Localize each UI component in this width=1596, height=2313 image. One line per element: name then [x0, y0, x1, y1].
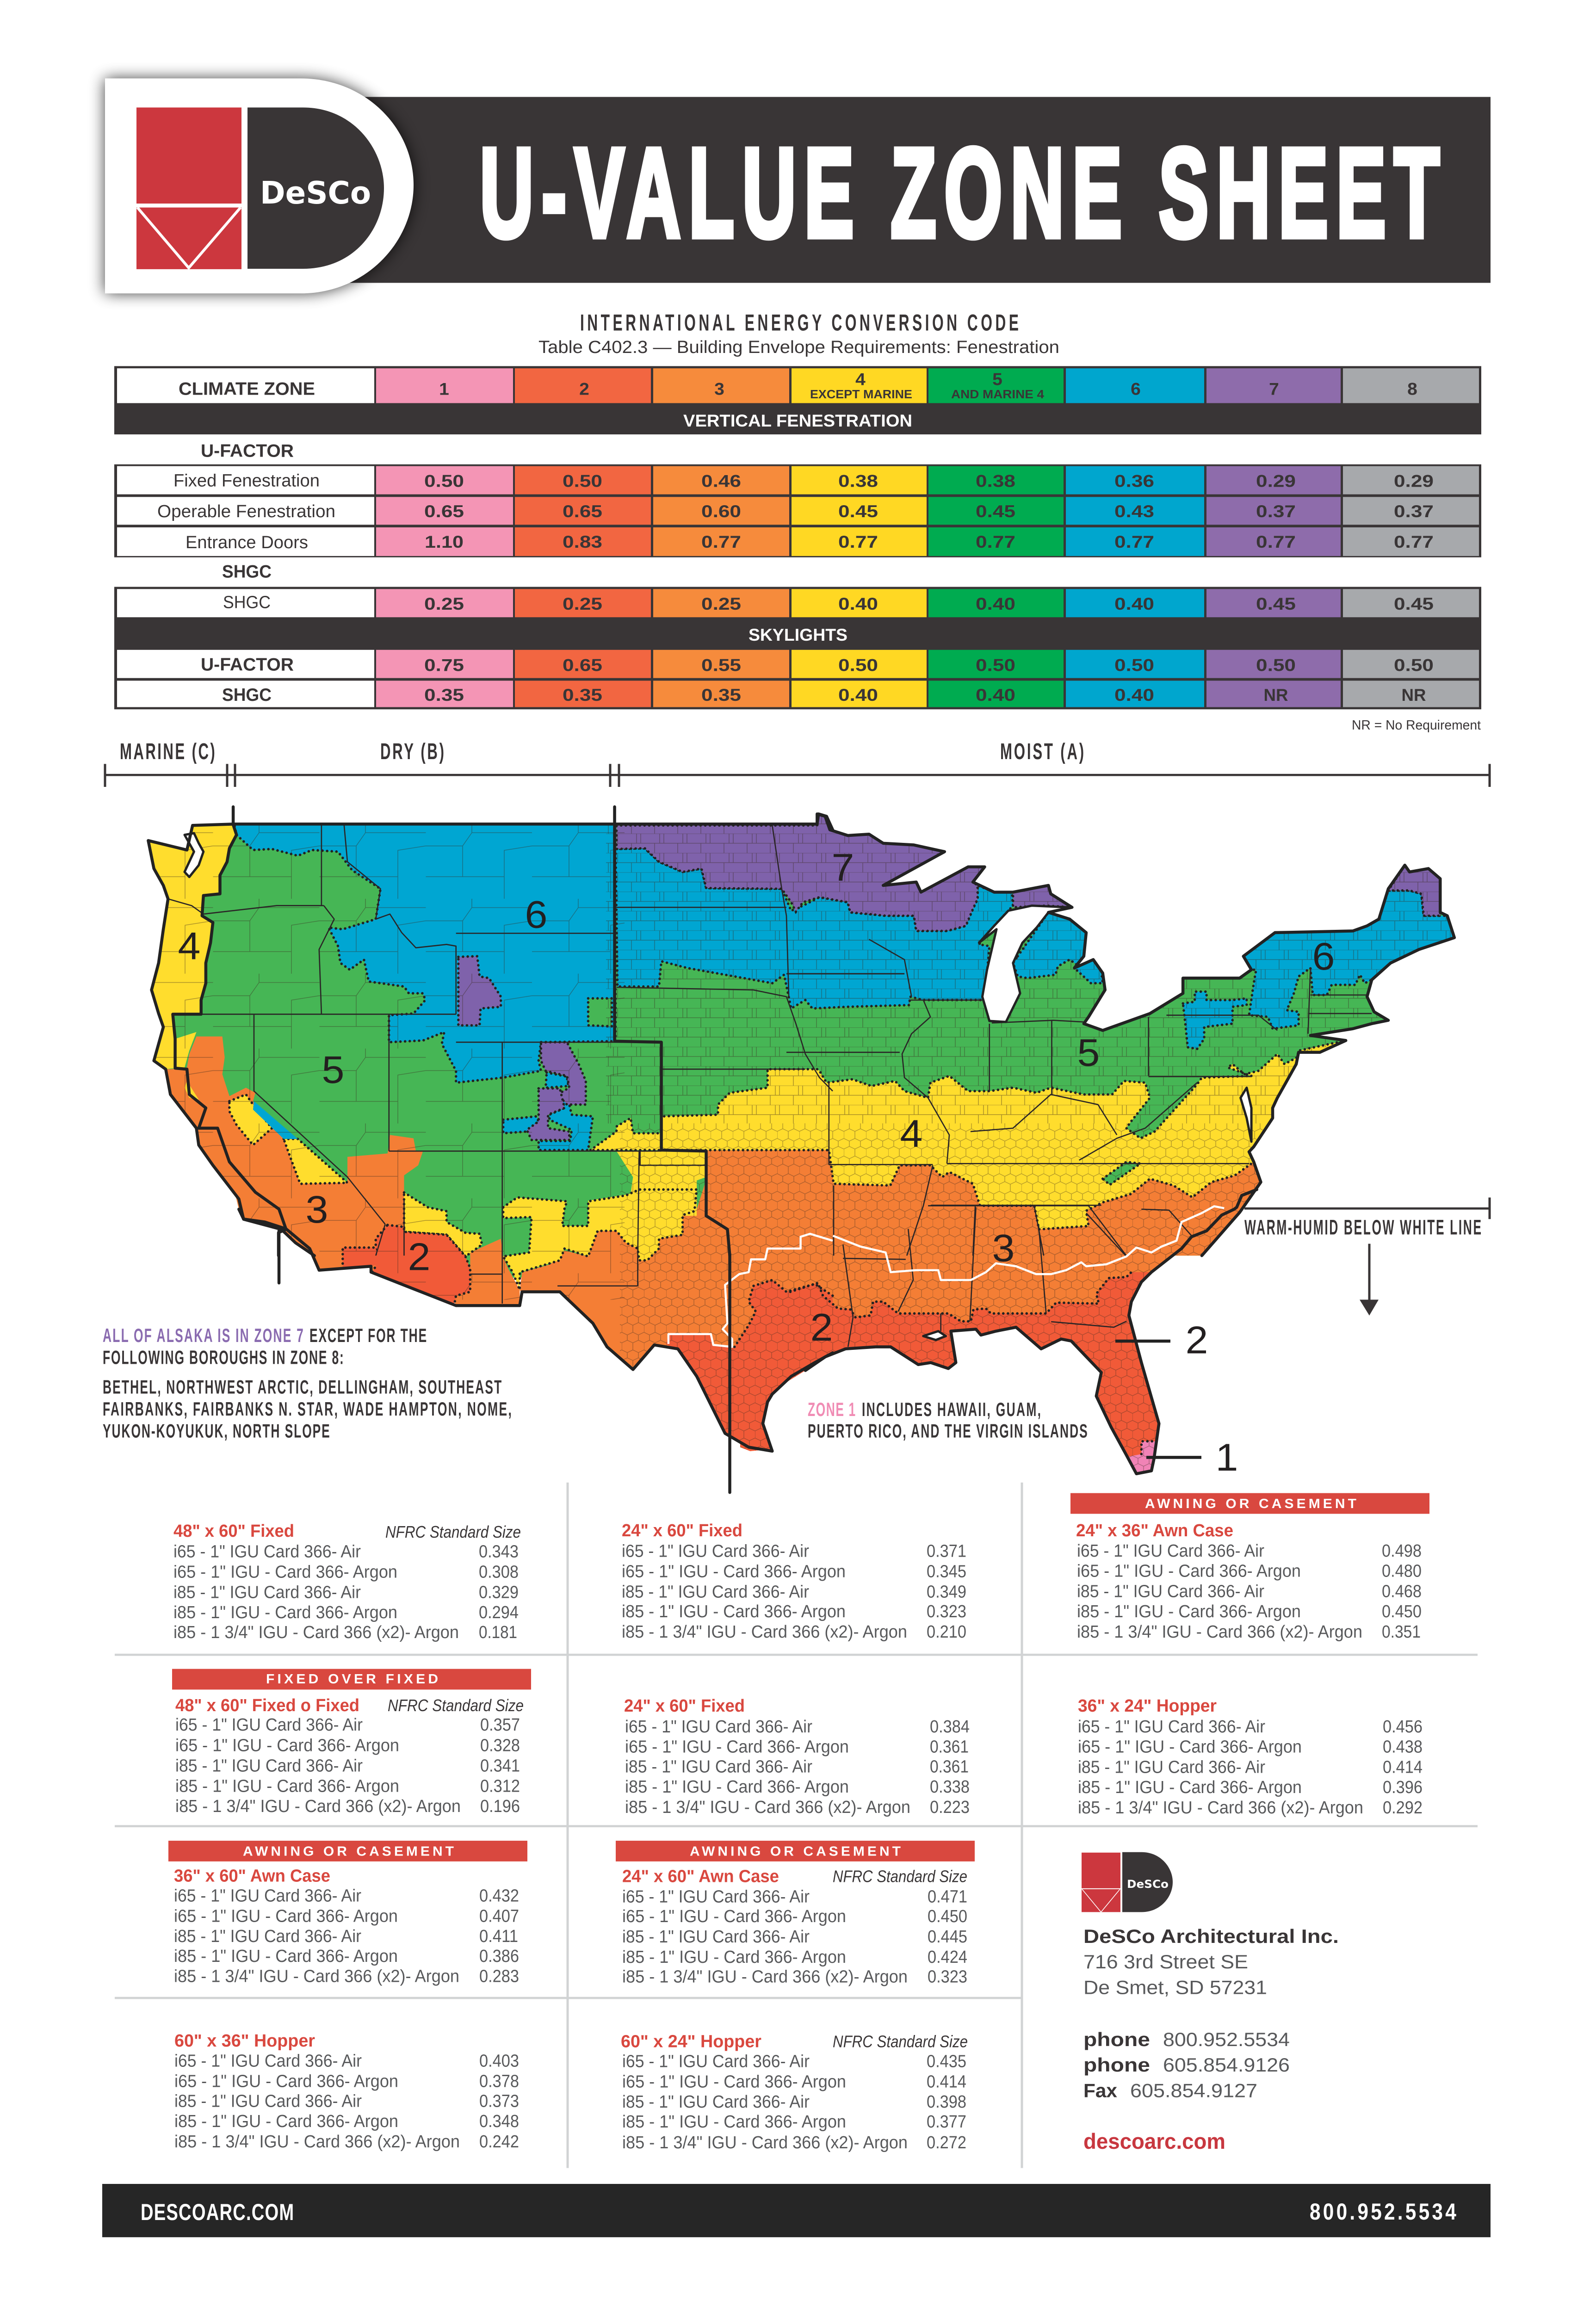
logo: DeSCo large mark: DeSCo [260, 176, 371, 211]
panel: 24 x 60 fixed second [624, 1696, 970, 1817]
panel: 36 x 24 hopper: i85 - 1" IGU Card 366- Air [1078, 1757, 1265, 1777]
table: U-factor rows: 0.45 [976, 502, 1015, 521]
panel: 60 x 36 hopper: i85 - 1" IGU - Card 366- Argon [174, 2112, 398, 2131]
panel: 36 x 60 awning casement: i65 - 1" IGU Card 366- Air [174, 1886, 361, 1905]
panel: 24 x 60 awning casement: AWNING OR CASEMENT [690, 1844, 901, 1859]
zone numbers on map: 3 [992, 1227, 1015, 1270]
table: U-factor rows: 0.77 [1394, 533, 1434, 552]
table: U-factor rows: 0.37 [1394, 502, 1434, 521]
panel: 36 x 24 hopper: 0.456 [1383, 1717, 1423, 1737]
table: SHGC and skylights rows: 0.40 [838, 686, 878, 705]
zone numbers on map: 7 [832, 846, 854, 889]
coastline and border outline [148, 814, 1454, 1474]
panel: 24 x 60 awning casement: 24" x 60" Awn Case [622, 1867, 779, 1886]
table: U-factor rows [114, 464, 1481, 557]
table: U-factor rows: 0.60 [701, 502, 741, 521]
panel: 36 x 24 hopper: 0.292 [1383, 1798, 1423, 1818]
panel: 60 x 24 hopper: i85 - 1 3/4" IGU - Card 366 (x2)- Argon [622, 2133, 908, 2152]
panel: 60 x 36 hopper: 60" x 36" Hopper [174, 2031, 315, 2051]
panel: 24 x 60 fixed second: 0.361 [930, 1737, 969, 1756]
arrow: warm-humid down [1360, 1244, 1379, 1316]
panel: fixed over fixed: FIXED OVER FIXED [266, 1672, 438, 1687]
label: U-factor section: U-FACTOR [201, 441, 294, 461]
panel: 24 x 36 awning casement: i65 - 1" IGU - Card 366- Argon [1077, 1561, 1301, 1581]
table: SHGC and skylights rows: 0.55 [701, 656, 741, 675]
zone numbers on map: 4 [178, 924, 200, 968]
small Tennessee zone 5 patch [1103, 1162, 1140, 1185]
panel: 24 x 60 awning casement: NFRC Standard Size [833, 1867, 967, 1886]
panel: 48 x 60 fixed: i85 - 1" IGU Card 366- Air [173, 1583, 361, 1602]
contact block: 605.854.9126 [1163, 2054, 1290, 2076]
contact block: De Smet, SD 57231 [1083, 1977, 1267, 1998]
panel: fixed over fixed: NFRC Standard Size [388, 1696, 524, 1715]
panel: 36 x 24 hopper: i65 - 1" IGU - Card 366- Argon [1078, 1737, 1302, 1756]
panel: fixed over fixed: i65 - 1" IGU Card 366- Air [175, 1715, 363, 1735]
table: SHGC and skylights rows: 0.40 [1114, 595, 1154, 614]
panel: 36 x 60 awning casement [168, 1841, 527, 1986]
table: U-factor rows: 0.45 [838, 502, 878, 521]
warm-humid white line [668, 1206, 1224, 1347]
panel: 24 x 60 awning casement: i65 - 1" IGU - Card 366- Argon [622, 1907, 846, 1926]
table: SHGC and skylights rows: SKYLIGHTS [749, 626, 847, 645]
panel: 36 x 60 awning casement: i85 - 1 3/4" IGU - Card 366 (x2)- Argon [174, 1967, 459, 1986]
panel: fixed over fixed [172, 1669, 531, 1816]
table: SHGC and skylights rows: 0.50 [1394, 656, 1434, 675]
panel: 24 x 60 fixed second: 0.361 [930, 1757, 969, 1776]
table: climate zone header and vertical fenestration bar: EXCEPT MARINE [810, 388, 912, 401]
panel: fixed over fixed: i85 - 1 3/4" IGU - Card 366 (x2)- Argon [175, 1797, 461, 1816]
table: SHGC and skylights rows: 0.40 [838, 595, 878, 614]
panel: 36 x 24 hopper: i85 - 1" IGU - Card 366- Argon [1078, 1778, 1302, 1797]
panel: 60 x 24 hopper: 0.414 [927, 2072, 966, 2091]
text block: Zone 1 note: INCLUDES HAWAII, GUAM, [862, 1399, 1041, 1421]
table: U-factor rows: 0.65 [424, 502, 464, 521]
contact block: phone [1083, 2054, 1150, 2076]
panel: 36 x 24 hopper: 0.396 [1383, 1778, 1423, 1797]
table: SHGC and skylights rows: 0.50 [976, 656, 1015, 675]
panel: fixed over fixed: i85 - 1" IGU - Card 366- Argon [175, 1776, 399, 1796]
table: U-factor rows: 0.65 [563, 502, 602, 521]
text block: Alaska note: FAIRBANKS, FAIRBANKS N. STAR, WADE HAMPTON, NOME, [103, 1398, 512, 1420]
text block: Alaska note: FOLLOWING BOROUGHS IN ZONE 8: [103, 1347, 344, 1368]
text block: Alaska note: ALL OF ALSAKA IS IN ZONE 7 [103, 1325, 303, 1347]
boundary dotted lines for red zone [343, 1248, 1157, 1454]
panel: 36 x 24 hopper: 0.438 [1383, 1737, 1423, 1756]
panel: 24 x 60 fixed second: 24" x 60" Fixed [624, 1696, 745, 1716]
panel: 24 x 60 awning casement: 0.424 [928, 1948, 967, 1967]
panel: 24 x 36 awning casement: i85 - 1" IGU Card 366- Air [1077, 1582, 1264, 1601]
contact block: descoarc.com [1083, 2129, 1225, 2153]
panel: 24 x 60 awning casement: i85 - 1 3/4" IGU - Card 366 (x2)- Argon [622, 1967, 908, 1986]
panel: 48 x 60 fixed: i65 - 1" IGU Card 366- Air [173, 1542, 361, 1561]
table: U-factor rows: 0.46 [701, 472, 741, 491]
marine and dry separators [173, 807, 730, 1492]
panel: 24 x 36 awning casement: 0.450 [1382, 1602, 1422, 1621]
table: climate zone header and vertical fenestration bar: 7 [1269, 380, 1279, 399]
panel: 60 x 36 hopper: i65 - 1" IGU - Card 366- Argon [174, 2072, 398, 2091]
panel: 48 x 60 fixed: i85 - 1" IGU - Card 366- Argon [173, 1603, 397, 1622]
table: SHGC and skylights rows: 0.50 [838, 656, 878, 675]
table: U-factor rows: Operable Fenestration [157, 502, 335, 521]
callout: warm-humid line [1244, 1198, 1490, 1239]
table: U-factor rows: Entrance Doors [186, 533, 308, 552]
footer bar [102, 2184, 1491, 2237]
panel: fixed over fixed: 0.196 [480, 1797, 520, 1816]
panel: 60 x 24 hopper: 0.435 [927, 2052, 966, 2071]
heading: international energy conversion code: INTERNATIONAL ENERGY CONVERSION CODE [580, 309, 1019, 335]
panel: 24 x 60 fixed: i65 - 1" IGU - Card 366- Argon [622, 1562, 846, 1581]
panel: 24 x 60 fixed: 0.323 [927, 1602, 966, 1621]
panel: 60 x 24 hopper: 60" x 24" Hopper [621, 2032, 761, 2051]
panel: 60 x 24 hopper: i85 - 1" IGU - Card 366- Argon [622, 2112, 846, 2132]
table: U-factor rows: 0.77 [1256, 533, 1296, 552]
panel: 24 x 60 fixed: i85 - 1" IGU Card 366- Air [622, 1582, 809, 1602]
table: U-factor rows: 0.77 [701, 533, 741, 552]
contact block: 605.854.9127 [1130, 2080, 1257, 2102]
logo: DeSCo large mark [105, 79, 414, 293]
footer bar: 800.952.5534 [1310, 2199, 1456, 2225]
table: SHGC and skylights rows: SHGC [223, 593, 271, 612]
label: SHGC section: SHGC [222, 562, 272, 581]
county lines [93, 815, 1531, 1476]
zone numbers on map: 2 [1186, 1319, 1208, 1362]
panel: fixed over fixed: i65 - 1" IGU - Card 366- Argon [175, 1736, 399, 1755]
panel: 48 x 60 fixed: 0.343 [479, 1542, 519, 1561]
panel: 24 x 60 fixed: 0.371 [927, 1542, 966, 1561]
table: U-factor rows: Fixed Fenestration [173, 471, 320, 490]
panel: fixed over fixed: i85 - 1" IGU Card 366- Air [175, 1756, 363, 1775]
panel: fixed over fixed: 0.341 [480, 1756, 520, 1775]
table: climate zone header and vertical fenestration bar: 2 [579, 380, 589, 399]
zone numbers on map: 5 [1077, 1031, 1100, 1074]
panel: 24 x 60 fixed second: i65 - 1" IGU - Card 366- Argon [625, 1737, 849, 1756]
panel: 24 x 60 fixed [622, 1521, 966, 1642]
panel: 24 x 36 awning casement: 24" x 36" Awn Case [1076, 1521, 1233, 1540]
logo: DeSCo small mark: DeSCo [1127, 1878, 1169, 1891]
panel: 24 x 36 awning casement: 0.498 [1382, 1541, 1422, 1561]
panel: 24 x 60 awning casement: 0.445 [928, 1927, 967, 1947]
table: U-factor rows: 0.77 [1114, 533, 1154, 552]
panel: 24 x 36 awning casement: 0.468 [1382, 1582, 1422, 1601]
table: U-factor rows: 1.10 [425, 533, 464, 552]
contact block: Fax [1083, 2080, 1117, 2102]
table: U-factor rows: 0.38 [838, 472, 878, 491]
text block: Zone 1 note: PUERTO RICO, AND THE VIRGIN ISLANDS [808, 1421, 1088, 1442]
zone 1 pink tip of Florida [1091, 1441, 1192, 1484]
panel: 48 x 60 fixed: i65 - 1" IGU - Card 366- Argon [173, 1562, 397, 1582]
panel: 24 x 60 fixed: 0.210 [927, 1622, 966, 1642]
zone numbers on map: 5 [322, 1048, 344, 1091]
table: SHGC and skylights rows: 0.50 [1256, 656, 1296, 675]
panel: 24 x 60 awning casement: i85 - 1" IGU Card 366- Air [622, 1927, 810, 1947]
table: SHGC and skylights rows: 0.40 [976, 686, 1015, 705]
table: SHGC and skylights rows: 0.35 [563, 686, 602, 705]
table: climate zone header and vertical fenestration bar: CLIMATE ZONE [179, 379, 315, 399]
panel: 24 x 60 fixed: i85 - 1" IGU - Card 366- Argon [622, 1602, 846, 1621]
product grid lines [115, 1483, 1478, 2168]
table: SHGC and skylights rows: 0.75 [424, 656, 464, 675]
zone 7 purple areas [458, 814, 1440, 1140]
panel: 24 x 60 fixed second: i65 - 1" IGU Card 366- Air [625, 1717, 812, 1737]
callout: warm-humid line: WARM-HUMID BELOW WHITE LINE [1244, 1215, 1481, 1239]
panel: 24 x 60 awning casement: i85 - 1" IGU - Card 366- Argon [622, 1948, 846, 1967]
zone 2 red areas [343, 1225, 1192, 1465]
panel: 24 x 60 fixed: i65 - 1" IGU Card 366- Air [622, 1542, 809, 1561]
table: U-factor rows: 0.50 [563, 472, 602, 491]
table: SHGC and skylights rows: U-FACTOR [201, 655, 294, 674]
panel: 24 x 36 awning casement [1070, 1493, 1429, 1642]
panel: 60 x 36 hopper: 0.378 [479, 2072, 519, 2091]
panel: 36 x 24 hopper: 0.414 [1383, 1757, 1423, 1777]
table: SHGC and skylights rows: 0.35 [424, 686, 464, 705]
table: climate zone header and vertical fenestration bar: 3 [714, 380, 724, 399]
zone numbers on map: 4 [900, 1112, 922, 1156]
panel: 36 x 60 awning casement: 0.411 [479, 1927, 518, 1946]
panel: 24 x 36 awning casement: i85 - 1" IGU - Card 366- Argon [1077, 1602, 1301, 1621]
panel: 24 x 60 fixed: i85 - 1 3/4" IGU - Card 366 (x2)- Argon [622, 1622, 907, 1642]
table: SHGC and skylights rows [114, 587, 1481, 709]
zone numbers on map: 2 [810, 1306, 833, 1349]
panel: 60 x 36 hopper: i65 - 1" IGU Card 366- Air [174, 2051, 362, 2071]
table: climate zone header and vertical fenestration bar: AND MARINE 4 [951, 388, 1044, 401]
table: SHGC and skylights rows: 0.35 [701, 686, 741, 705]
panel: 24 x 60 awning casement: 0.471 [928, 1887, 967, 1906]
panel: 24 x 60 fixed second: 0.384 [930, 1717, 970, 1737]
panel: 36 x 60 awning casement: 0.386 [479, 1947, 519, 1966]
table: SHGC and skylights rows: 0.40 [976, 595, 1015, 614]
table: SHGC and skylights rows: 0.50 [1114, 656, 1154, 675]
contact block: 716 3rd Street SE [1083, 1951, 1248, 1973]
table: SHGC and skylights rows: 0.65 [563, 656, 602, 675]
text block: Alaska note: BETHEL, NORTHWEST ARCTIC, DELLINGHAM, SOUTHEAST [103, 1376, 502, 1398]
table: climate zone header and vertical fenestration bar: 4 [855, 370, 866, 389]
panel: 48 x 60 fixed: NFRC Standard Size [385, 1522, 521, 1541]
text block: Alaska note [103, 1325, 512, 1442]
zone 5 patch in Wyoming [588, 998, 612, 1027]
panel: 60 x 24 hopper: 0.398 [927, 2092, 966, 2112]
panel: 24 x 60 awning casement [616, 1841, 975, 1986]
panel: 36 x 60 awning casement: AWNING OR CASEMENT [243, 1844, 454, 1859]
panel: 24 x 60 fixed second: 0.223 [930, 1798, 970, 1817]
panel: 36 x 24 hopper: 36" x 24" Hopper [1078, 1696, 1217, 1716]
panel: 36 x 60 awning casement: 36" x 60" Awn Case [174, 1866, 330, 1886]
footer bar: DESCOARC.COM [141, 2199, 294, 2225]
zone numbers on map: 2 [408, 1236, 430, 1279]
zone numbers on map: 1 [1216, 1436, 1238, 1479]
contact block: phone [1083, 2029, 1150, 2051]
table: SHGC and skylights rows: 0.45 [1394, 595, 1434, 614]
panel: fixed over fixed: 0.357 [480, 1715, 520, 1735]
zone numbers on map: 6 [525, 893, 547, 936]
zone numbers on map: 6 [1312, 935, 1335, 978]
panel: 24 x 60 fixed second: 0.338 [930, 1777, 970, 1797]
map: US climate zones [93, 793, 1531, 1492]
contact block: 800.952.5534 [1163, 2029, 1290, 2051]
table: U-factor rows: 0.43 [1114, 502, 1154, 521]
table: SHGC and skylights rows: 0.40 [1114, 686, 1154, 705]
table: SHGC and skylights rows: SHGC [222, 685, 272, 705]
text block: Zone 1 note: ZONE 1 [808, 1399, 855, 1421]
panel: 24 x 36 awning casement: i65 - 1" IGU Card 366- Air [1077, 1541, 1264, 1561]
panel: 48 x 60 fixed: 48" x 60" Fixed [173, 1521, 294, 1541]
panel: 24 x 60 fixed: 24" x 60" Fixed [622, 1521, 742, 1540]
panel: fixed over fixed: 0.328 [480, 1736, 520, 1755]
table: U-factor rows: 0.29 [1256, 472, 1296, 491]
moisture regime scale bar: DRY (B) [380, 739, 444, 764]
text block: Alaska note: YUKON-KOYUKUK, NORTH SLOPE [103, 1421, 330, 1442]
panel: 36 x 60 awning casement: 0.283 [479, 1967, 519, 1986]
zone numbers on map [178, 846, 1335, 1479]
panel: 36 x 60 awning casement: i85 - 1" IGU - Card 366- Argon [174, 1947, 398, 1966]
subheading: table reference: Table C402.3 — Building Envelope Requirements: Fenestration [538, 338, 1059, 357]
table: SHGC and skylights rows: NR [1401, 686, 1426, 705]
zone 4 yellow areas [140, 822, 1346, 1290]
text block: Alaska note: EXCEPT FOR THE [309, 1325, 427, 1347]
table: U-factor rows: 0.29 [1394, 472, 1434, 491]
panel: 60 x 24 hopper: NFRC Standard Size [833, 2032, 968, 2051]
contact block: DeSCo Architectural Inc. [1083, 1926, 1339, 1948]
panel: 36 x 60 awning casement: 0.407 [479, 1906, 519, 1926]
moisture regime scale bar: MARINE (C) [120, 739, 215, 764]
panel: 60 x 36 hopper: i85 - 1" IGU Card 366- Air [174, 2091, 362, 2111]
table: climate zone header and vertical fenestration bar: 5 [992, 370, 1002, 389]
panel: 24 x 36 awning casement: i85 - 1 3/4" IGU - Card 366 (x2)- Argon [1077, 1622, 1362, 1642]
table: U-factor rows: 0.83 [563, 533, 602, 552]
state lines [168, 825, 1372, 1347]
table: climate zone header and vertical fenestration bar [114, 366, 1481, 434]
logo: DeSCo small mark [1082, 1852, 1173, 1912]
panel: 24 x 60 awning casement: 0.450 [928, 1907, 967, 1926]
moisture regime scale bar: MOIST (A) [1000, 739, 1084, 764]
panel: fixed over fixed: 0.312 [480, 1776, 520, 1796]
panel: 60 x 36 hopper: i85 - 1 3/4" IGU - Card 366 (x2)- Argon [174, 2132, 460, 2152]
text block: Zone 1 note [808, 1399, 1088, 1442]
panel: 48 x 60 fixed [173, 1521, 521, 1642]
table: climate zone header and vertical fenestration bar: 6 [1131, 380, 1141, 399]
panel: 36 x 60 awning casement: 0.432 [479, 1886, 519, 1905]
lakes and bays [185, 833, 1251, 1340]
table: U-factor rows: 0.50 [424, 472, 464, 491]
panel: 60 x 24 hopper: i65 - 1" IGU - Card 366- Argon [622, 2072, 846, 2091]
panel: 60 x 36 hopper: 0.242 [479, 2132, 519, 2152]
panel: 24 x 60 fixed: 0.349 [927, 1582, 966, 1602]
panel: 60 x 24 hopper: 0.377 [927, 2112, 966, 2132]
title: U-VALUE ZONE SHEET [480, 122, 1440, 264]
panel: 24 x 36 awning casement: AWNING OR CASEMENT [1145, 1497, 1356, 1511]
panel: 48 x 60 fixed: 0.329 [479, 1583, 519, 1602]
panel: 36 x 24 hopper: i85 - 1 3/4" IGU - Card 366 (x2)- Argon [1078, 1798, 1363, 1818]
panel: 24 x 60 fixed: 0.345 [927, 1562, 966, 1581]
moisture regime scale bar [105, 739, 1490, 787]
table: U-factor rows: 0.38 [976, 472, 1015, 491]
header bar [324, 97, 1491, 283]
panel: fixed over fixed: 48" x 60" Fixed o Fixed [175, 1696, 359, 1715]
zone 3 orange areas [140, 1037, 1305, 1484]
panel: 60 x 36 hopper: 0.348 [479, 2112, 519, 2131]
panel: 60 x 24 hopper: 0.272 [927, 2133, 966, 2152]
panel: 60 x 24 hopper: i85 - 1" IGU Card 366- Air [622, 2092, 810, 2112]
panel: 48 x 60 fixed: i85 - 1 3/4" IGU - Card 366 (x2)- Argon [173, 1623, 459, 1642]
panel: 36 x 24 hopper: i65 - 1" IGU Card 366- Air [1078, 1717, 1265, 1737]
zone 6 blue areas [234, 824, 1454, 1150]
panel: 24 x 36 awning casement: 0.480 [1382, 1561, 1422, 1581]
panel: 24 x 60 fixed second: i85 - 1" IGU - Card 366- Argon [625, 1777, 849, 1797]
panel: 24 x 36 awning casement: 0.351 [1382, 1622, 1421, 1642]
panel: 36 x 60 awning casement: i85 - 1" IGU Card 366- Air [174, 1927, 361, 1946]
table: U-factor rows: 0.37 [1256, 502, 1296, 521]
note: NR definition: NR = No Requirement [1352, 718, 1481, 733]
table: U-factor rows: 0.77 [838, 533, 878, 552]
table: U-factor rows: 0.77 [976, 533, 1015, 552]
zone 5 base fill [167, 827, 1443, 1278]
table: climate zone header and vertical fenestration bar: 1 [439, 380, 449, 399]
zone numbers on map: 3 [306, 1188, 328, 1231]
panel: 24 x 60 fixed second: i85 - 1" IGU Card 366- Air [625, 1757, 812, 1776]
contact block [1083, 1926, 1339, 2153]
panel: 48 x 60 fixed: 0.294 [479, 1603, 519, 1622]
table: climate zone header and vertical fenestration bar: VERTICAL FENESTRATION [683, 412, 912, 431]
table: U-factor rows: 0.36 [1114, 472, 1154, 491]
panel: 60 x 24 hopper [621, 2032, 968, 2152]
panel: 24 x 60 awning casement: i65 - 1" IGU Card 366- Air [622, 1887, 810, 1906]
table: SHGC and skylights rows: 0.25 [563, 595, 602, 614]
table: SHGC and skylights rows: 0.25 [701, 595, 741, 614]
table: SHGC and skylights rows: 0.25 [424, 595, 464, 614]
panel: 36 x 60 awning casement: i65 - 1" IGU - Card 366- Argon [174, 1906, 398, 1926]
panel: 60 x 36 hopper: 0.373 [479, 2091, 519, 2111]
table: SHGC and skylights rows: NR [1264, 686, 1288, 705]
table: climate zone header and vertical fenestration bar: 8 [1407, 380, 1417, 399]
panel: 24 x 60 awning casement: 0.323 [928, 1967, 967, 1986]
panel: 36 x 24 hopper [1078, 1696, 1423, 1818]
panel: 48 x 60 fixed: 0.181 [479, 1623, 517, 1642]
panel: 60 x 24 hopper: i65 - 1" IGU Card 366- Air [622, 2052, 810, 2071]
panel: 60 x 36 hopper: 0.403 [479, 2051, 519, 2071]
table: SHGC and skylights rows: 0.45 [1256, 595, 1296, 614]
panel: 24 x 60 fixed second: i85 - 1 3/4" IGU - Card 366 (x2)- Argon [625, 1798, 910, 1817]
panel: 48 x 60 fixed: 0.308 [479, 1562, 519, 1582]
panel: 60 x 36 hopper [174, 2031, 519, 2152]
